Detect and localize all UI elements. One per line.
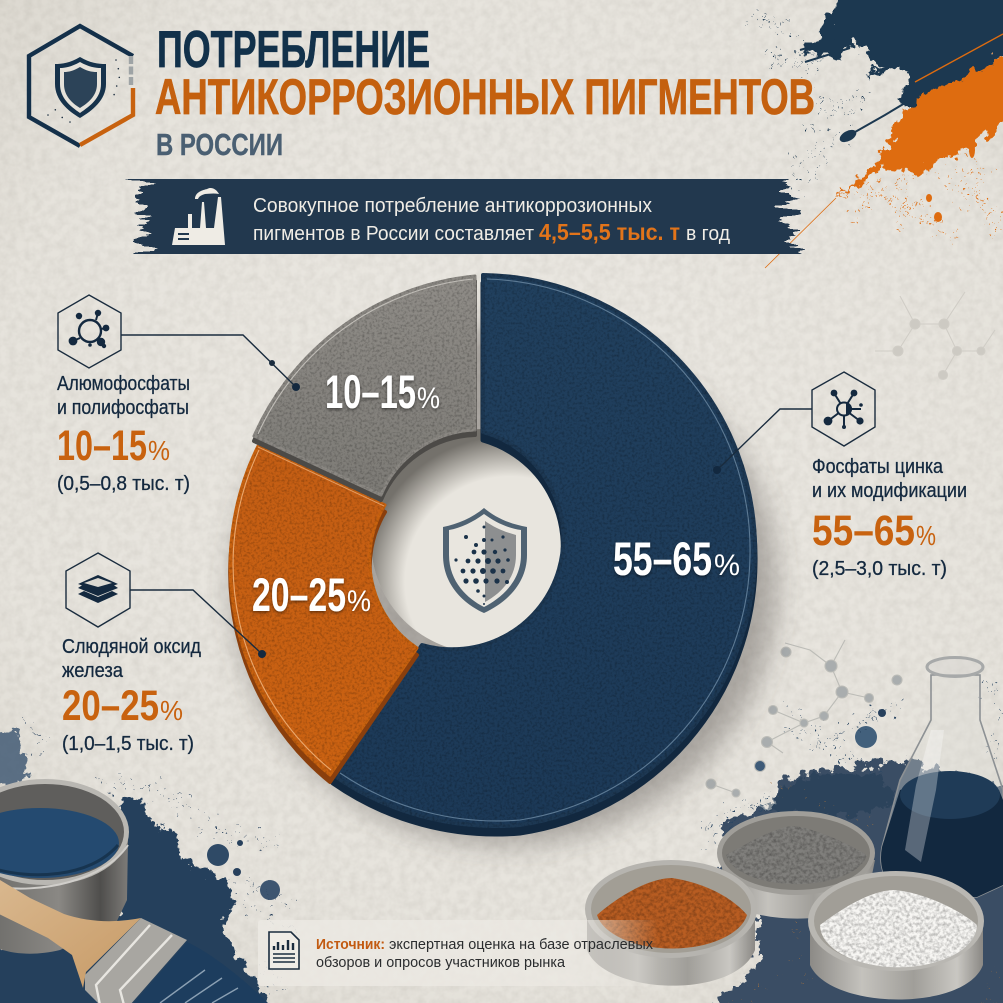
- callout: aluminium phosphates: [57, 295, 300, 495]
- value: 55–65: [812, 507, 915, 555]
- icon: molecule network: [812, 372, 875, 446]
- donut value: 55-65%: 55–65: [613, 532, 712, 585]
- paint splash: top right: [756, 0, 1003, 268]
- icon: layers: [66, 553, 130, 627]
- value: 10–15: [57, 422, 147, 470]
- segment: micaceous iron oxide 20-25%: [230, 446, 417, 782]
- value: %: [916, 520, 936, 551]
- banner text: пигментов в России составляет: [253, 223, 534, 245]
- label text: и полифосфаты: [57, 397, 189, 419]
- donut value: 55-65%: %: [714, 549, 740, 582]
- banner text: [253, 195, 730, 245]
- icon: molecule ring: [58, 295, 121, 368]
- callout: zinc phosphates: [713, 372, 967, 580]
- label text: [812, 456, 967, 502]
- segment: zinc phosphates 55-65%: [333, 275, 755, 834]
- label text: Алюмофосфаты: [57, 373, 190, 395]
- molecule watermark: lower right: [706, 640, 902, 797]
- callout: micaceous iron oxide: [62, 553, 266, 755]
- label text: [62, 636, 201, 682]
- tonnage: (1,0–1,5 тыс. т): [62, 733, 194, 755]
- title: ПОТРЕБЛЕНИЕ: [157, 21, 430, 79]
- value: 20–25: [62, 682, 159, 730]
- label text: [57, 373, 190, 419]
- source panel: [258, 920, 658, 986]
- source text: [316, 936, 653, 971]
- banner: total consumption: [140, 179, 790, 254]
- tin: grey powder: [717, 811, 875, 919]
- icon: factory: [172, 188, 225, 245]
- paint brush: [0, 877, 270, 1003]
- value: %: [160, 695, 183, 726]
- label text: Слюдяной оксид: [62, 636, 201, 658]
- paint can: [0, 779, 129, 954]
- flask with blue liquid: [881, 658, 1003, 897]
- paint splash: bottom left: [0, 720, 300, 1003]
- title: [155, 21, 815, 162]
- donut value: 10-15%: %: [417, 382, 440, 415]
- donut chart: [230, 275, 777, 845]
- label text: и их модификации: [812, 480, 967, 502]
- label text: железа: [62, 660, 124, 682]
- segment: aluminium phosphates 10-15%: [254, 276, 475, 500]
- source text: Источник:: [316, 936, 385, 953]
- molecule watermark: upper right: [875, 292, 995, 380]
- source text: обзоров и опросов участников рынка: [316, 954, 566, 971]
- tonnage: (0,5–0,8 тыс. т): [57, 473, 190, 495]
- leader line: [130, 590, 266, 658]
- donut value: 10-15%: 10–15: [325, 365, 416, 418]
- tin: orange powder: [585, 860, 757, 986]
- icon: central shield: [443, 508, 527, 613]
- banner text: в год: [686, 223, 730, 245]
- value: %: [148, 435, 170, 466]
- leader line: [121, 335, 300, 391]
- donut value: 20-25%: 20–25: [252, 568, 346, 621]
- label text: Фосфаты цинка: [812, 456, 944, 478]
- title: В РОССИИ: [156, 127, 283, 162]
- logo: hexagon with shield: [29, 26, 133, 146]
- tonnage: (2,5–3,0 тыс. т): [812, 558, 947, 580]
- tin: white powder: [808, 871, 984, 1000]
- banner text: 4,5–5,5 тыс. т: [539, 219, 680, 245]
- banner text: Совокупное потребление антикоррозионных: [253, 195, 652, 217]
- paint splash: bottom right: [700, 680, 1003, 1003]
- icon: report document: [269, 932, 299, 969]
- leader line: [713, 409, 812, 474]
- donut value: 20-25%: %: [347, 585, 371, 618]
- source text: экспертная оценка на базе отраслевых: [389, 936, 653, 953]
